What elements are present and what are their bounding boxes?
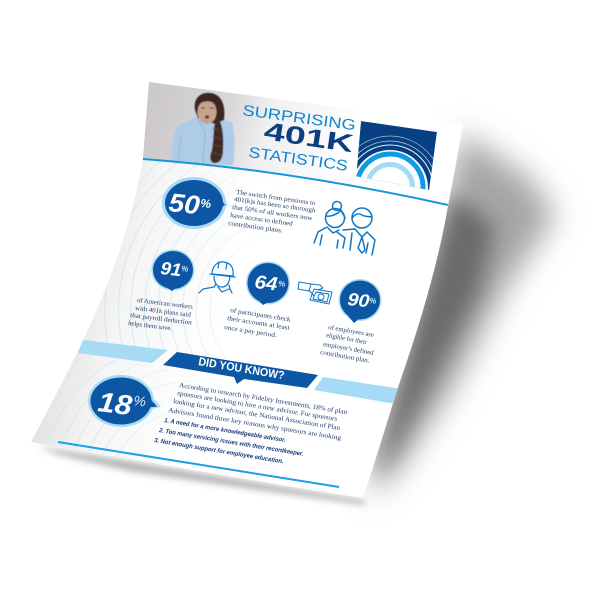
stat bubble: 50%: 50 [167,187,202,220]
text: 91 percent: helps them save. [128,320,173,332]
footer rule [58,442,339,487]
text: 90 percent [320,324,375,365]
band: left [78,340,168,363]
stat bubble: 18%: % [133,392,147,409]
text: numbered reasons [154,417,304,465]
stat bubble: 50% [162,177,228,229]
text: pensions [228,189,317,235]
paper sheet [31,82,463,498]
text: pensions: 401(k)s has been so thorough [234,196,317,214]
stat bubble: 18%: 18 [96,386,134,421]
text: 90 percent: eligible for their [326,332,368,346]
text: did you know paragraph: looking for a new advisor, the National Association of Plan [173,398,341,432]
text: did you know paragraph: Advisors found three key reasons why sponsors are looking [168,407,342,442]
text: 64 percent: their accounts at least [227,315,290,332]
text: 91 percent: of American workers [137,297,194,311]
page shading [31,160,452,476]
banner: did you know [163,352,318,388]
header rule [143,159,448,205]
text: 90 percent: contribution plan. [320,349,370,365]
text: 91 percent [128,297,194,332]
title: SURPRISING [241,102,357,134]
text: numbered reasons: 1. A need for a more knowledgeable advisor. [164,417,286,444]
stat bubble: 90%: % [369,296,377,306]
text: pensions: The switch from pensions to [236,189,317,207]
text: numbered reasons: 2. Too many servicing issues with their recordkeeper. [158,427,304,458]
text: did you know paragraph: According to research by Fidelity Investments, 18% of plan [179,382,348,416]
text: 90 percent: of employees are [328,324,374,339]
title: 401K [262,117,355,158]
icon: construction worker [199,262,235,293]
stat bubble: 90%: 90 [347,289,371,311]
text: 91 percent: with 401k plans said [135,305,192,319]
text: did you know paragraph: sponsors are looking to hire a new advisor. For sponsors [177,390,338,423]
text: pensions: that 50% of all workers now [232,204,313,222]
stat bubble: 64% [246,262,290,305]
text: 64 percent: once a pay period. [224,324,277,339]
text: 91 percent: that payroll deduction [130,312,193,327]
text: did you know paragraph [168,382,348,442]
text: pensions: have access to defined [230,212,294,228]
text: pensions: contribution plans. [228,220,284,235]
stat bubble: 90% [338,279,382,323]
text: 64 percent [224,307,292,339]
background arcs [46,162,264,457]
stat bubble: 91% [152,250,194,291]
photo: woman [172,93,234,165]
title [241,102,357,175]
stat bubble: 64%: 64 [253,272,279,295]
header background [143,82,452,204]
stat bubble: 64%: % [278,279,286,289]
stat bubble: 18% [88,375,161,427]
stat bubble: 91%: % [181,264,189,274]
text: numbered reasons: 3. Not enough support for employee education. [154,437,284,465]
text: 64 percent: of participants check [230,307,292,324]
paper drop shadow [36,132,556,505]
text: 90 percent: employer's defined [323,341,375,357]
stat bubble: 91%: 91 [160,258,183,280]
icon: two business people [314,202,375,255]
banner: did you know: DID YOU KNOW? [198,356,285,382]
title: STATISTICS [247,144,349,175]
icon: hand with cash [298,282,332,304]
stat bubble: 50%: % [200,196,212,211]
logo: rainbow square [356,121,437,190]
band: right [314,377,402,404]
